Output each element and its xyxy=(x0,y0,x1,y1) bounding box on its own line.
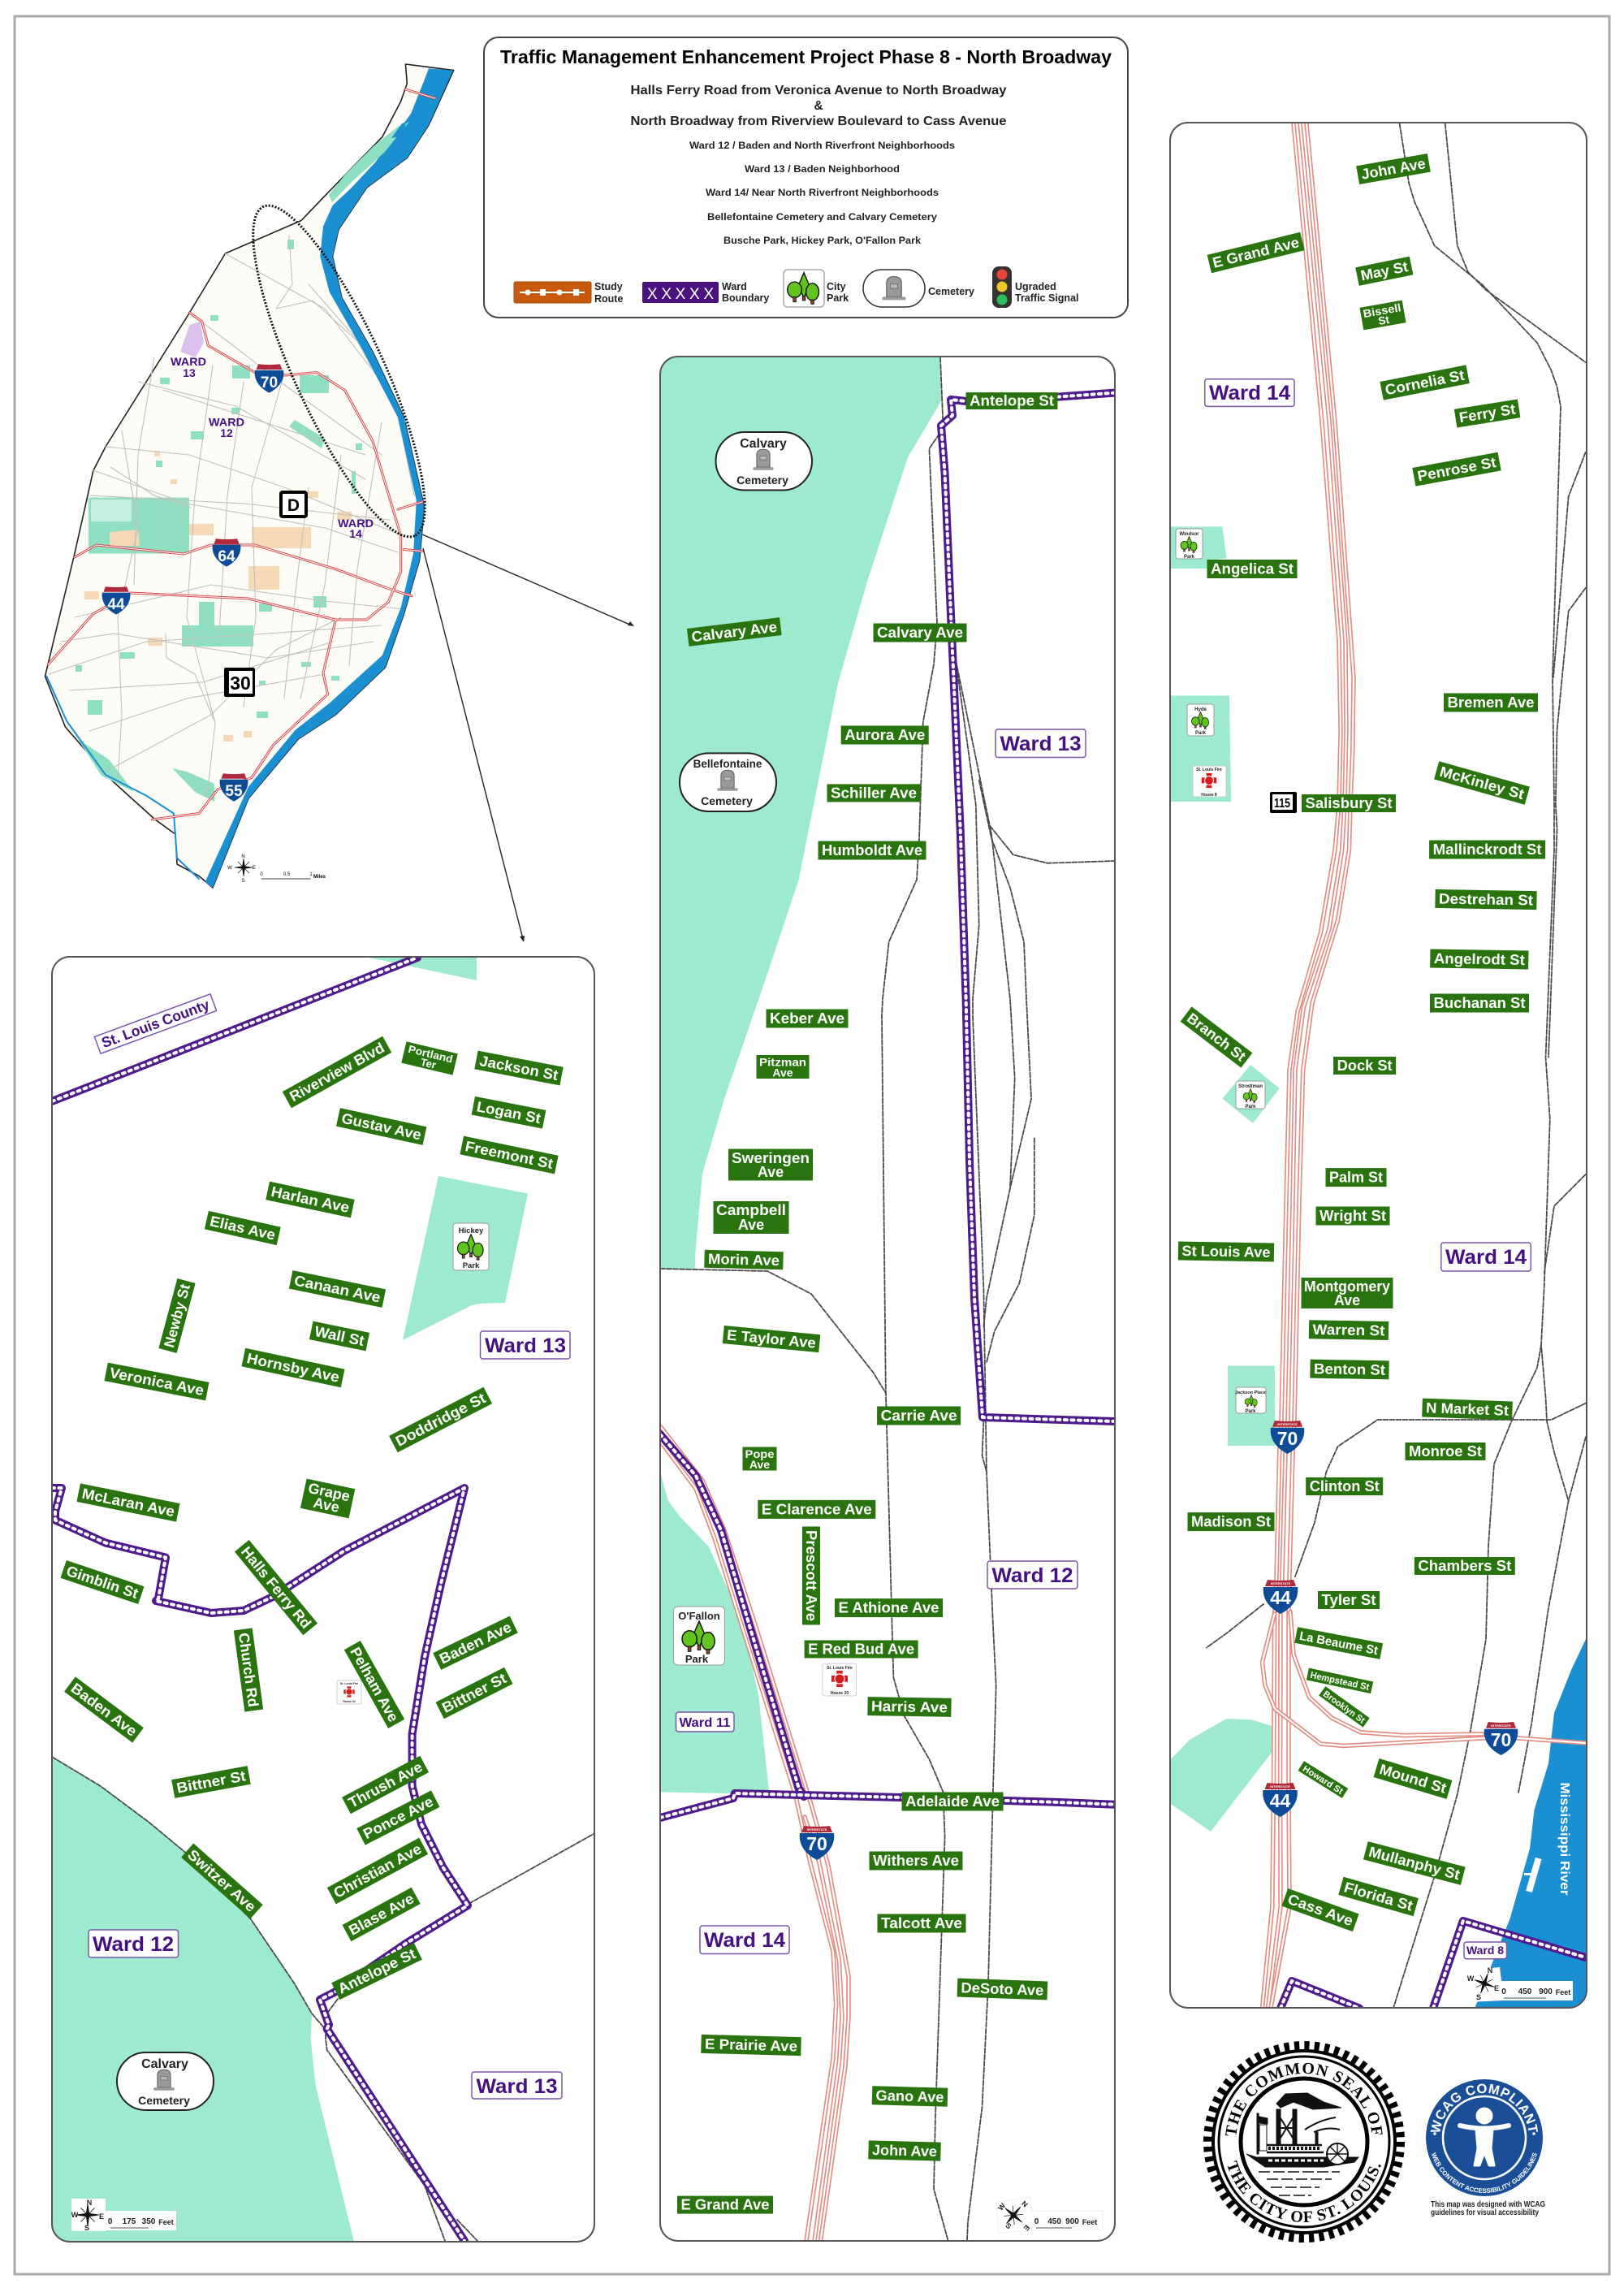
icon: Strodtman Park xyxy=(1236,1081,1265,1109)
street label: Brooklyn St: Brooklyn St xyxy=(1321,1689,1367,1726)
street label: La Beaume St: La Beaume St xyxy=(1298,1629,1379,1658)
legend: study route: Route xyxy=(594,293,623,305)
street label: Mullanphy St: Mullanphy St xyxy=(1367,1844,1462,1883)
compass and scale bar: W xyxy=(996,2201,1008,2212)
arrow: overview to left panel xyxy=(423,548,525,942)
shield: I-70: 70 xyxy=(806,1833,827,1854)
compass and scale bar: Feet xyxy=(1556,1988,1570,1996)
compass and scale bar: 0 xyxy=(1501,1987,1506,1996)
overview ward labels xyxy=(171,355,374,540)
street label: Hornsby Ave: Hornsby Ave xyxy=(245,1350,341,1386)
ward label: Ward 14: Ward 14 xyxy=(704,1929,785,1952)
street label: Cornelia St: Cornelia St xyxy=(1384,367,1466,398)
route 30 marker xyxy=(224,668,255,697)
legend: cemetery xyxy=(863,270,974,307)
ward label: Ward 13 lower: Ward 13 xyxy=(476,2075,557,2098)
overview compass and scale xyxy=(227,854,326,884)
street label: E Prairie Ave: E Prairie Ave xyxy=(705,2036,797,2054)
icon: Windsor Park: Windsor xyxy=(1180,532,1199,537)
street label: Cass Ave: Cass Ave xyxy=(1285,1891,1355,1929)
street label: Doddridge St: Doddridge St xyxy=(393,1390,488,1450)
subtitle xyxy=(630,84,1007,128)
street label: Sweringen Ave: Ave xyxy=(758,1164,784,1180)
overview compass and scale: E xyxy=(253,866,256,871)
street label: Elias Ave: Elias Ave xyxy=(209,1213,277,1243)
street label: Warren St: Warren St xyxy=(1312,1321,1385,1339)
street label: Salisbury St: Salisbury St xyxy=(1306,795,1392,811)
street label: Dock St: Dock St xyxy=(1337,1057,1393,1074)
street label: John Ave: John Ave xyxy=(1360,155,1427,183)
shield: I-70 east: INTERSTATE xyxy=(1491,1724,1511,1728)
shield: I-70 overview xyxy=(255,364,283,393)
street label: Bissell St xyxy=(1360,301,1406,330)
street label: Grape Ave: Grape xyxy=(307,1480,352,1504)
legend: city park: City xyxy=(827,281,846,292)
Mississippi River xyxy=(205,68,453,888)
street label: Grape Ave: Ave xyxy=(312,1494,341,1516)
street label: Portland Ter xyxy=(402,1042,457,1075)
icon: Calvary Cemetery: Calvary xyxy=(740,437,787,451)
overview compass and scale: 0.5 xyxy=(283,872,291,877)
icon: O'Fallon Park: Park xyxy=(685,1653,709,1665)
ward label: Ward 12: Ward 12 xyxy=(93,1933,174,1956)
shield: I-55 overview xyxy=(220,773,248,802)
icon: Hyde Park: Park xyxy=(1195,731,1207,736)
overview ward labels: WARD xyxy=(171,355,206,368)
street label: Angelrodt St: Angelrodt St xyxy=(1434,950,1525,968)
shield: I-70 upper xyxy=(1271,1421,1304,1454)
icon: Fire House 20 xyxy=(823,1663,856,1696)
shield: I-44 lower: 44 xyxy=(1270,1790,1290,1811)
icon: Jackson Place Park xyxy=(1235,1387,1266,1414)
overview street grid xyxy=(49,236,414,796)
compass and scale bar: 175 xyxy=(123,2217,136,2226)
icon: Calvary Cemetery xyxy=(117,2052,214,2110)
shield: I-70 upper: INTERSTATE xyxy=(1277,1422,1298,1426)
compass and scale bar: 0 xyxy=(1034,2217,1039,2226)
icon: Windsor Park: Park xyxy=(1184,555,1195,560)
shield: I-64 overview xyxy=(213,538,240,567)
shield: I-44 upper: INTERSTATE xyxy=(1271,1581,1291,1585)
compass and scale bar: 0 xyxy=(108,2217,113,2226)
compass and scale bar xyxy=(996,2197,1103,2233)
street label: Schiller Ave: Schiller Ave xyxy=(831,785,917,801)
street label: Montgomery Ave: Montgomery xyxy=(1304,1278,1390,1295)
street label: Clinton St: Clinton St xyxy=(1310,1478,1380,1494)
panel background xyxy=(1170,123,1587,2008)
icon: Bellefontaine Cemetery: Bellefontaine xyxy=(693,758,762,770)
panel map layers xyxy=(52,957,594,2242)
WCAG caption: guidelines for visual accessibility xyxy=(1431,2208,1539,2217)
street label: Pelham Ave: Pelham Ave xyxy=(347,1645,402,1724)
arrow: overview to middle panel xyxy=(422,534,634,626)
panel map layers xyxy=(660,357,1115,2241)
legend: study route xyxy=(514,281,623,305)
street label: E Athione Ave: E Athione Ave xyxy=(838,1600,939,1616)
overview compass and scale: 0 xyxy=(260,872,263,877)
WCAG caption: This map was designed with WCAG xyxy=(1431,2200,1545,2209)
icon: Fire House 20: St. Louis Fire xyxy=(827,1666,853,1671)
street label: Campbell Ave xyxy=(714,1202,788,1233)
ward label: Ward 14 lower xyxy=(1441,1243,1531,1271)
icon: O'Fallon Park xyxy=(674,1607,724,1665)
icon: Calvary Cemetery: Calvary xyxy=(141,2057,188,2071)
street label: Ferry St: Ferry St xyxy=(1458,401,1517,426)
compass and scale bar: 900 xyxy=(1065,2217,1079,2226)
ward label: Ward 8 xyxy=(1464,1942,1507,1959)
street label: Harlan Ave: Harlan Ave xyxy=(270,1183,351,1216)
street label: Mound St: Mound St xyxy=(1377,1761,1449,1797)
accessibility person icon xyxy=(1460,2108,1509,2165)
street label: Newby St: Newby St xyxy=(161,1282,193,1349)
shield: I-44 overview xyxy=(102,586,130,615)
shield: I-70 east xyxy=(1484,1722,1518,1755)
label: St. Louis County: St. Louis County xyxy=(99,997,212,1051)
street label: Destrehan St: Destrehan St xyxy=(1439,890,1533,909)
shield: I-44 upper xyxy=(1263,1580,1298,1614)
street label: Mallinckrodt St: Mallinckrodt St xyxy=(1433,841,1542,858)
seal: Common Seal of the City of St. Louis xyxy=(1203,2041,1405,2243)
street label: Bittner St east: Bittner St xyxy=(439,1670,509,1716)
dotted study-area ellipse xyxy=(222,188,456,555)
street label: Bissell St: Bissell xyxy=(1363,301,1402,320)
route 30 marker: 30 xyxy=(230,673,251,694)
street label: May St: May St xyxy=(1359,258,1410,284)
panel: title and legend xyxy=(484,37,1128,318)
legend: city park: Park xyxy=(827,292,849,304)
ward label: Ward 11: Ward 11 xyxy=(679,1716,731,1730)
riverfront park and lake xyxy=(329,122,409,202)
subtitle: North Broadway from Riverview Boulevard to Cass Avenue xyxy=(630,115,1007,128)
street label: Montgomery Ave xyxy=(1302,1278,1393,1308)
neighborhoods list: Ward 13 / Baden Neighborhood xyxy=(745,165,900,175)
shield: I-70 upper: 70 xyxy=(1277,1428,1298,1449)
street label: Blase Ave: Blase Ave xyxy=(346,1890,417,1939)
street label: Palm St: Palm St xyxy=(1329,1170,1383,1186)
overview compass and scale: 1 xyxy=(309,872,313,877)
street label: Prescott Ave: Prescott Ave xyxy=(803,1530,819,1621)
street label: Monroe St: Monroe St xyxy=(1409,1443,1482,1460)
icon: Hickey Park: Hickey xyxy=(459,1226,484,1235)
overview parks and campuses xyxy=(76,122,409,802)
seal steamboat illustration xyxy=(1246,2093,1358,2195)
street label: Campbell Ave: Campbell xyxy=(716,1202,786,1218)
street label: Aurora Ave: Aurora Ave xyxy=(844,727,925,743)
street label: Tyler St: Tyler St xyxy=(1322,1592,1376,1608)
seal: Common Seal of the City of St. Louis: THE COMMON SEAL OF xyxy=(1225,2063,1383,2136)
icon: fire house xyxy=(337,1680,361,1704)
street label: Pope Ave: Pope xyxy=(745,1447,775,1460)
route D marker xyxy=(281,492,306,517)
street label: Keber Ave: Keber Ave xyxy=(770,1010,844,1027)
street label: Veronica Ave: Veronica Ave xyxy=(108,1365,205,1399)
street label: Wall St: Wall St xyxy=(313,1323,365,1349)
street label: Canaan Ave: Canaan Ave xyxy=(293,1272,382,1306)
panel map layers xyxy=(1171,123,1587,2008)
street label: Pitzman Ave: Ave xyxy=(772,1066,793,1079)
street label: E Grand Ave: E Grand Ave xyxy=(1211,234,1301,271)
shield: I-44 overview: 44 xyxy=(107,596,125,613)
street label: Sweringen Ave xyxy=(729,1149,812,1180)
street label: Freemont St: Freemont St xyxy=(464,1138,555,1172)
icon: Jackson Place Park: Park xyxy=(1245,1409,1256,1414)
ward label: Ward 14 lower: Ward 14 xyxy=(1445,1246,1527,1269)
street label: Benton St: Benton St xyxy=(1314,1360,1385,1378)
icon: Bellefontaine Cemetery xyxy=(680,753,776,811)
street label: DeSoto Ave: DeSoto Ave xyxy=(961,1979,1044,1999)
panel: North Broadway lower section xyxy=(1170,123,1587,2008)
neighborhoods list: Ward 12 / Baden and North Riverfront Neighborhoods xyxy=(689,141,955,151)
street label: Humboldt Ave: Humboldt Ave xyxy=(822,842,922,859)
street label: Ponce Ave: Ponce Ave xyxy=(361,1793,436,1842)
street label: N Market St: N Market St xyxy=(1426,1399,1509,1419)
street label: Christian Ave: Christian Ave xyxy=(330,1840,425,1901)
icon: fire house: St. Louis Fire xyxy=(340,1682,358,1685)
overview compass and scale: Miles xyxy=(313,875,326,880)
street label: Portland Ter: Portland xyxy=(407,1043,454,1065)
street label: McLaran Ave: McLaran Ave xyxy=(80,1486,176,1520)
overview map: city of St. Louis xyxy=(45,64,456,888)
street label: Adelaide Ave: Adelaide Ave xyxy=(905,1793,1000,1810)
icon: Hyde Park xyxy=(1187,704,1214,736)
street label: Pope Ave xyxy=(743,1447,776,1471)
compass and scale bar: N xyxy=(1488,1966,1492,1974)
street label: Montgomery Ave: Ave xyxy=(1334,1292,1360,1308)
badge: WCAG compliant: WEB CONTENT ACCESSIBILITY GUIDELINES xyxy=(1432,2152,1537,2193)
street label: Gustav Ave: Gustav Ave xyxy=(340,1110,423,1143)
legend: upgraded traffic signal xyxy=(992,266,1078,308)
street label: Antelope St: Antelope St xyxy=(335,1945,418,1997)
street label: Howard St: Howard St xyxy=(1301,1764,1345,1797)
street label: Portland Ter: Ter xyxy=(419,1056,438,1071)
street label: Chambers St: Chambers St xyxy=(1418,1558,1511,1574)
legend: city park xyxy=(784,270,849,307)
shield: I-70 overview: 70 xyxy=(261,374,278,391)
street label: Bittner St west: Bittner St xyxy=(175,1767,247,1797)
icon: O'Fallon Park: O'Fallon xyxy=(678,1610,720,1622)
route D marker: D xyxy=(287,496,300,515)
shield: I-44 lower: INTERSTATE xyxy=(1270,1784,1290,1788)
street label: Gano Ave: Gano Ave xyxy=(875,2087,944,2105)
compass and scale bar: W xyxy=(71,2211,79,2219)
compass and scale bar: 350 xyxy=(142,2217,156,2226)
panel: North Broadway upper section xyxy=(660,357,1115,2241)
compass and scale bar: W xyxy=(1467,1974,1475,1983)
street label: John Ave: John Ave xyxy=(872,2142,937,2160)
street label: Logan St: Logan St xyxy=(475,1098,542,1127)
icon: Hickey Park: Park xyxy=(463,1261,480,1270)
street label: Halls Ferry Rd: Halls Ferry Rd xyxy=(238,1543,314,1632)
shield: I-70: INTERSTATE xyxy=(807,1827,827,1832)
panel background xyxy=(660,357,1115,2241)
panel background xyxy=(52,957,594,2242)
shield: I-70 xyxy=(800,1826,834,1860)
panel: Halls Ferry north section xyxy=(52,957,594,2242)
route 115 marker: 115 xyxy=(1274,797,1290,811)
icon: Calvary Cemetery xyxy=(716,432,812,491)
legend: upgraded traffic signal: Ugraded xyxy=(1015,281,1056,292)
icon: Calvary Cemetery: Cemetery xyxy=(138,2094,190,2107)
compass and scale bar: E xyxy=(1494,1984,1499,1992)
legend: study route: Study xyxy=(594,281,623,292)
legend: ward boundary: Boundary xyxy=(722,292,769,304)
compass and scale bar: Feet xyxy=(1082,2218,1097,2226)
street label: Branch St: Branch St xyxy=(1184,1010,1249,1065)
icon: Fire House 8: St. Louis Fire xyxy=(1196,768,1222,772)
legend: upgraded traffic signal: Traffic Signal xyxy=(1015,292,1078,304)
River Des Peres xyxy=(46,677,199,879)
street label: Calvary Ave: Calvary Ave xyxy=(877,625,963,641)
panel border xyxy=(660,357,1115,2241)
street label: Antelope St: Antelope St xyxy=(970,393,1054,409)
street label: Carrie Ave: Carrie Ave xyxy=(881,1408,957,1424)
icon: Fire House 8 xyxy=(1193,766,1226,798)
shield: I-44 upper: 44 xyxy=(1270,1587,1291,1608)
badge: WCAG compliant: WCAG COMPLIANT xyxy=(1431,2084,1538,2132)
legend: cemetery: Cemetery xyxy=(928,286,974,297)
overview compass and scale: N xyxy=(241,854,245,859)
overview compass and scale: S xyxy=(242,879,245,884)
neighborhoods list: Ward 14/ Near North Riverfront Neighborhoods xyxy=(706,188,939,198)
overview compass and scale: W xyxy=(227,866,232,871)
street label: Withers Ave: Withers Ave xyxy=(873,1853,959,1869)
neighborhoods list: Busche Park, Hickey Park, O'Fallon Park xyxy=(723,236,922,246)
icon: Hickey Park xyxy=(453,1223,489,1270)
overview interstates xyxy=(48,89,435,820)
ward label: Ward 12: Ward 12 xyxy=(992,1564,1073,1587)
panel border xyxy=(52,957,594,2242)
seal: Common Seal of the City of St. Louis: THE CITY OF ST. LOUIS. xyxy=(1228,2160,1381,2222)
street label: Penrose St: Penrose St xyxy=(1416,454,1497,484)
compass and scale bar: S xyxy=(1476,1993,1481,2001)
compass and scale bar: N xyxy=(87,2199,92,2207)
street label: Church Rd: Church Rd xyxy=(235,1632,261,1708)
street label: Thrush Ave: Thrush Ave xyxy=(346,1758,425,1811)
street label: Jackson St: Jackson St xyxy=(478,1053,559,1083)
shield: I-44 lower xyxy=(1263,1783,1298,1817)
street label: Bissell St: St xyxy=(1377,314,1391,327)
street label: Sweringen Ave: Sweringen xyxy=(732,1150,810,1166)
street label: Pitzman Ave: Pitzman xyxy=(759,1056,806,1069)
street label: Grape Ave xyxy=(301,1479,355,1518)
street label: Florida St: Florida St xyxy=(1342,1879,1415,1914)
ward label: Ward 13 upper: Ward 13 xyxy=(485,1334,566,1357)
overview ward labels: 13 xyxy=(183,366,196,379)
street label: Calvary Ave in cemetery: Calvary Ave xyxy=(690,619,778,645)
neighborhoods list xyxy=(689,141,955,246)
overview ward labels: 14 xyxy=(349,527,362,540)
shield: I-64 overview: 64 xyxy=(218,548,235,565)
street label: Campbell Ave: Ave xyxy=(738,1217,764,1233)
ward label: Ward 14 upper: Ward 14 xyxy=(1209,382,1290,404)
shield: I-55 overview: 55 xyxy=(225,783,243,800)
shield: I-70 east: 70 xyxy=(1491,1729,1511,1750)
street label: Switzer Ave: Switzer Ave xyxy=(184,1846,259,1915)
subtitle: Halls Ferry Road from Veronica Avenue to North Broadway xyxy=(630,84,1007,97)
overview ward labels: WARD xyxy=(209,416,244,429)
street label: Baden Ave east: Baden Ave xyxy=(437,1619,514,1667)
street label: Pope Ave: Ave xyxy=(749,1458,770,1471)
street label: St Louis Ave: St Louis Ave xyxy=(1181,1243,1271,1261)
street label: Gimblin St: Gimblin St xyxy=(64,1563,140,1602)
compass and scale bar: 450 xyxy=(1047,2217,1061,2226)
subtitle: & xyxy=(814,99,823,113)
compass and scale bar: E xyxy=(99,2212,104,2221)
compass and scale bar: N xyxy=(1020,2199,1030,2209)
compass and scale bar: 450 xyxy=(1518,1987,1532,1996)
legend: ward boundary: Ward xyxy=(722,281,747,292)
street label: E Clarence Ave: E Clarence Ave xyxy=(762,1501,872,1517)
badge: WCAG compliant xyxy=(1426,2079,1543,2196)
compass and scale bar: Feet xyxy=(158,2218,174,2226)
ward label: Ward 8: Ward 8 xyxy=(1466,1944,1504,1957)
icon: Jackson Place Park: Jackson Place xyxy=(1235,1391,1266,1395)
ward label: Ward 13: Ward 13 xyxy=(1000,733,1082,755)
street label: Baden Ave west: Baden Ave xyxy=(68,1680,140,1740)
street label: E Grand Ave: E Grand Ave xyxy=(680,2197,770,2213)
ward label: Ward 11 xyxy=(676,1712,734,1732)
street label: Angelica St: Angelica St xyxy=(1211,560,1294,577)
icon: Fire House 20: House 20 xyxy=(831,1691,849,1696)
street label: Buchanan St: Buchanan St xyxy=(1434,995,1526,1011)
legend: ward boundary: XXXXX xyxy=(647,286,714,303)
overview ward labels: WARD xyxy=(338,517,374,530)
street label: Riverview Blvd: Riverview Blvd xyxy=(287,1040,387,1105)
legend: ward boundary xyxy=(642,281,769,304)
street label: Madison St: Madison St xyxy=(1191,1514,1271,1530)
street label: Pitzman Ave xyxy=(757,1056,809,1079)
street label: Talcott Ave: Talcott Ave xyxy=(881,1915,962,1931)
icon: Fire House 8: House 8 xyxy=(1201,793,1217,798)
icon: Strodtman Park: Park xyxy=(1245,1105,1256,1109)
neighborhoods list: Bellefontaine Cemetery and Calvary Cemetery xyxy=(707,213,938,223)
WCAG caption xyxy=(1431,2200,1545,2217)
street label: Wright St: Wright St xyxy=(1320,1208,1386,1224)
title: Traffic Management Enhancement Project Phase 8 - North Broadway xyxy=(500,46,1112,67)
street label: E Taylor Ave: E Taylor Ave xyxy=(726,1326,817,1352)
panel border xyxy=(1170,123,1587,2008)
street label: E Red Bud Ave: E Red Bud Ave xyxy=(808,1641,914,1657)
icon: fire house: House 32 xyxy=(343,1700,356,1703)
compass and scale bar: S xyxy=(1004,2221,1013,2230)
city outline xyxy=(45,64,454,888)
street label: Bremen Ave: Bremen Ave xyxy=(1447,694,1535,711)
street label: Morin Ave: Morin Ave xyxy=(708,1251,780,1269)
overview ward labels: 12 xyxy=(220,426,233,439)
compass and scale bar xyxy=(71,2199,176,2232)
icon: Strodtman Park: Strodtman xyxy=(1238,1084,1263,1089)
street label: Harris Ave: Harris Ave xyxy=(871,1698,948,1715)
icon: Hyde Park: Hyde xyxy=(1194,707,1207,712)
street label: McKinley St: McKinley St xyxy=(1438,763,1526,802)
Mississippi River water xyxy=(1475,1637,1587,2008)
street label: Hempstead St: Hempstead St xyxy=(1309,1671,1370,1693)
icon: Windsor Park xyxy=(1176,529,1203,560)
compass and scale bar xyxy=(1466,1966,1573,2002)
route 115 marker xyxy=(1270,792,1297,813)
compass and scale bar: S xyxy=(84,2224,89,2232)
icon: Bellefontaine Cemetery: Cemetery xyxy=(701,794,753,807)
icon: Calvary Cemetery: Cemetery xyxy=(736,474,788,487)
river label: Mississippi River: Mississippi River xyxy=(1557,1782,1571,1896)
highlighted ward area xyxy=(180,322,204,357)
compass and scale bar: E xyxy=(1022,2223,1031,2232)
compass and scale bar: 900 xyxy=(1539,1987,1553,1996)
